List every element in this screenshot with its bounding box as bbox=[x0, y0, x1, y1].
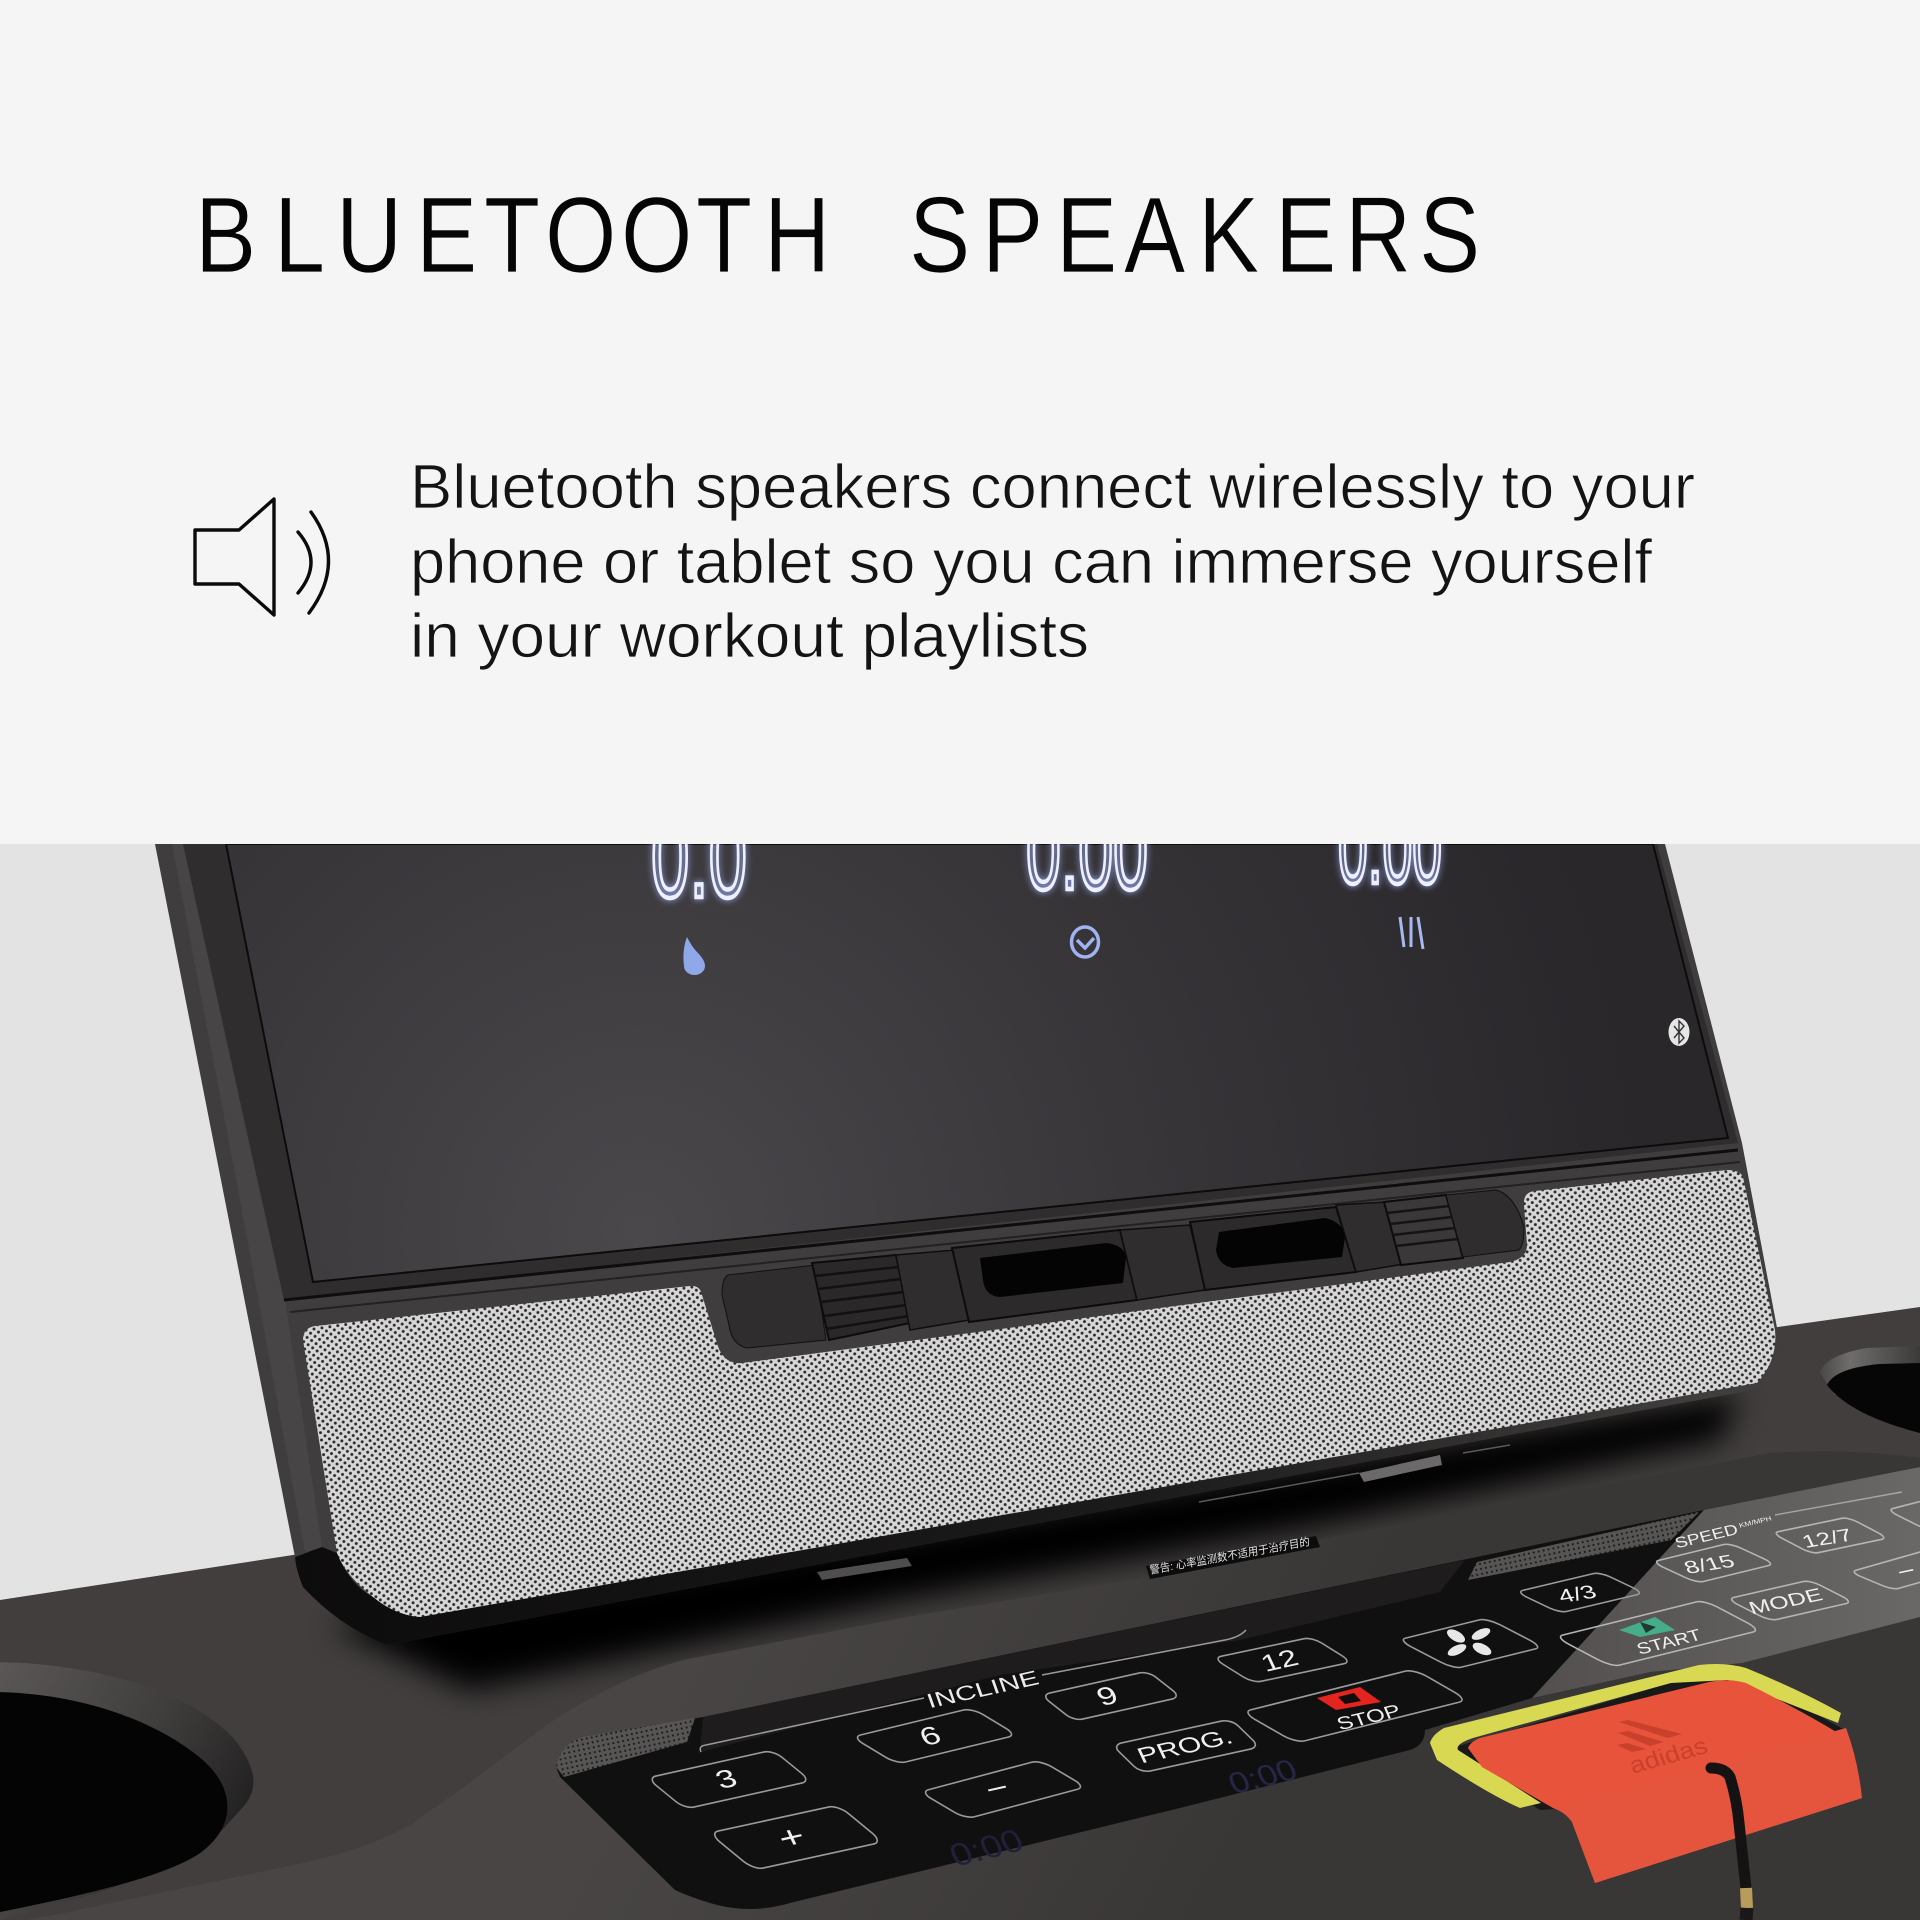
shadow slots under monitor bbox=[817, 1445, 1510, 1580]
key: 6 bbox=[852, 1708, 1017, 1764]
display readout: time: 0:00 bbox=[1026, 788, 1148, 913]
key: minus bbox=[920, 1760, 1086, 1819]
incline bracket line bbox=[700, 1630, 1246, 1752]
warning sticker: 警告: 心率监测数不适用于治疗目的 bbox=[1149, 1534, 1310, 1577]
key: 12/7: 12/7 bbox=[1799, 1525, 1856, 1552]
description text: in your workout playlists bbox=[410, 602, 1089, 671]
monitor housing bbox=[155, 844, 1778, 1645]
incline label: INCLINE bbox=[924, 1667, 1042, 1713]
key: minus: − bbox=[980, 1771, 1014, 1805]
icon: bluetooth badge bbox=[1668, 1018, 1690, 1046]
speed label: KM/MPH bbox=[1738, 1514, 1773, 1529]
dim readout lower left: 0:00 bbox=[944, 1823, 1029, 1874]
display readout: calories: 0.0 bbox=[651, 791, 747, 923]
middle segment three bbox=[1336, 1202, 1404, 1272]
key: 4/3: 4/3 bbox=[1554, 1581, 1600, 1607]
safety key: red tab bbox=[1468, 1680, 1862, 1883]
display readout: distance: 0.00 bbox=[1338, 790, 1442, 906]
key: 8/15: 8/15 bbox=[1681, 1551, 1738, 1578]
key: partial top right bbox=[1887, 1492, 1920, 1530]
key: 12/7 bbox=[1772, 1517, 1888, 1554]
black glass panel bbox=[556, 1510, 1704, 1909]
key: 9 bbox=[1041, 1671, 1181, 1721]
safety key cord bbox=[1711, 1768, 1747, 1920]
gloss lower frame bbox=[295, 1417, 1566, 1645]
middle segment two bbox=[1120, 1225, 1205, 1300]
key: STOP bbox=[1242, 1669, 1468, 1743]
dim readout lower right: 0:00 bbox=[1223, 1752, 1302, 1800]
icon: clock bbox=[1072, 927, 1098, 957]
key: 3 bbox=[647, 1750, 811, 1809]
key: MODE: MODE bbox=[1746, 1584, 1826, 1618]
key: STOP: STOP bbox=[1334, 1701, 1404, 1734]
control tray bbox=[722, 1190, 1524, 1348]
key: right minus bbox=[1850, 1548, 1920, 1590]
key: MODE bbox=[1727, 1580, 1853, 1621]
key: 12 bbox=[1213, 1637, 1352, 1683]
left holder block bbox=[952, 1230, 1137, 1322]
monitor inner bezel bbox=[183, 844, 1738, 1300]
left ribbed wheel bbox=[812, 1255, 910, 1340]
perforated strip right bbox=[1468, 1512, 1699, 1580]
key: 4/3 bbox=[1516, 1572, 1644, 1613]
title: BLUETOOTH SPEAKERS bbox=[195, 175, 1480, 296]
safety key: groove behind tab bbox=[1445, 1675, 1845, 1810]
right holder block bbox=[1190, 1207, 1356, 1290]
icon: speaker with sound waves bbox=[195, 499, 329, 615]
left cup holder bbox=[0, 1662, 253, 1920]
speed label bbox=[1672, 1492, 1902, 1552]
key: PROG: PROG. bbox=[1133, 1724, 1237, 1768]
red tab fold shading bbox=[1553, 1728, 1862, 1883]
frame light strip bbox=[172, 844, 322, 1552]
left end cap bbox=[722, 1265, 826, 1348]
panel: white text header bbox=[0, 0, 1920, 844]
key: 12: 12 bbox=[1257, 1645, 1303, 1677]
key: START bbox=[1555, 1600, 1761, 1667]
key: START: START bbox=[1634, 1625, 1704, 1658]
middle segment one bbox=[896, 1250, 969, 1330]
key: plus bbox=[709, 1805, 883, 1870]
safety key: yellow surround bbox=[1430, 1664, 1841, 1808]
key: 3: 3 bbox=[711, 1764, 742, 1795]
touch control panel bbox=[556, 1467, 1920, 1909]
key: fan bbox=[1398, 1618, 1543, 1669]
description text: Bluetooth speakers connect wirelessly to your bbox=[410, 453, 1695, 522]
grille highlight bbox=[510, 1314, 690, 1486]
description text: phone or tablet so you can immerse yourself bbox=[410, 528, 1653, 597]
separator between screen and speaker bbox=[284, 1150, 1740, 1312]
key: PROG bbox=[1112, 1719, 1260, 1773]
treadmill console deck bbox=[0, 1307, 1920, 1920]
panel: treadmill photo scene bbox=[0, 788, 1920, 1920]
raised panel surround bbox=[608, 1610, 951, 1690]
grey speed panel bbox=[1532, 1467, 1920, 1698]
speaker grille bbox=[303, 1170, 1775, 1617]
key: 6: 6 bbox=[915, 1721, 946, 1752]
display screen bbox=[226, 844, 1728, 1282]
speed label: SPEED bbox=[1672, 1520, 1740, 1552]
reflection band on panel bbox=[700, 1560, 1465, 1752]
key: plus: + bbox=[772, 1818, 811, 1856]
key: right minus: − bbox=[1893, 1557, 1919, 1584]
right ribbed wheel bbox=[1384, 1195, 1463, 1265]
perforated strip left bbox=[556, 1718, 695, 1777]
icon: road bbox=[1400, 917, 1423, 949]
description text bbox=[410, 453, 1695, 671]
adidas logo: adidas bbox=[1626, 1733, 1711, 1779]
shadow under monitor bbox=[330, 1395, 1740, 1690]
right cup holder bbox=[1820, 1346, 1920, 1433]
key: 9: 9 bbox=[1092, 1681, 1123, 1712]
icon: flame drop bbox=[683, 937, 705, 975]
key: 8/15 bbox=[1652, 1543, 1775, 1583]
right end cap bbox=[1446, 1190, 1524, 1257]
